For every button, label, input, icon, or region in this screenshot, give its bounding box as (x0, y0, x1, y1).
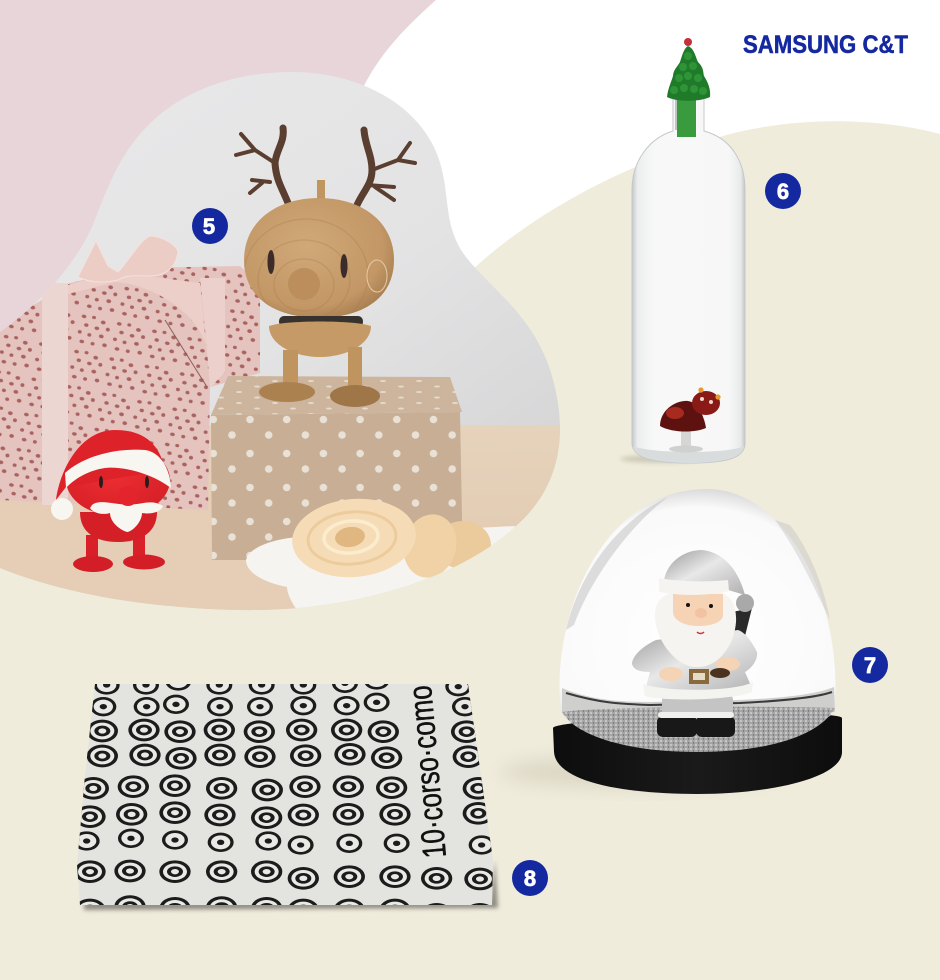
bottle shadow (620, 455, 700, 463)
box lettering: 10·corso·como (401, 684, 453, 860)
number badge 5 (192, 208, 228, 244)
glass dome (560, 489, 835, 740)
photo: reindeer and santa figures with gifts (0, 60, 570, 615)
logo: Samsung C&T: SAMSUNG C&T (743, 31, 908, 59)
black base (553, 714, 842, 794)
box shadow (84, 860, 498, 910)
number badge 8: 8 (524, 866, 536, 891)
globe shadow (500, 756, 780, 788)
number badge 6 (765, 173, 801, 209)
photo wall (34, 72, 560, 425)
kraft polka dot gift (211, 376, 462, 560)
green tree stopper (667, 38, 710, 137)
pink wrapped gift (0, 236, 260, 510)
product: santa snow globe (500, 489, 842, 794)
bottle body (632, 98, 745, 463)
background shape: pink (0, 0, 436, 400)
number badge 5: 5 (203, 214, 215, 239)
ring pattern (74, 670, 496, 926)
antlers (236, 128, 415, 205)
photo table (0, 425, 570, 615)
silver santa (632, 550, 757, 737)
box face (77, 684, 493, 905)
plate of cookies (246, 494, 515, 610)
number badge 6: 6 (777, 179, 789, 204)
dome rim highlights (566, 497, 668, 630)
red glass figure (660, 387, 721, 452)
sack and staff (728, 608, 752, 655)
reindeer wooden figure (236, 128, 415, 407)
number badge 7: 7 (864, 653, 876, 678)
product: glass bottle with tree stopper (620, 38, 745, 463)
water line band (562, 687, 835, 712)
number badge 7 (852, 647, 888, 683)
red santa figure (51, 430, 171, 572)
number badge 8 (512, 860, 548, 896)
product: 10 Corso Como patterned box (77, 684, 500, 913)
silver glitter (562, 707, 835, 752)
